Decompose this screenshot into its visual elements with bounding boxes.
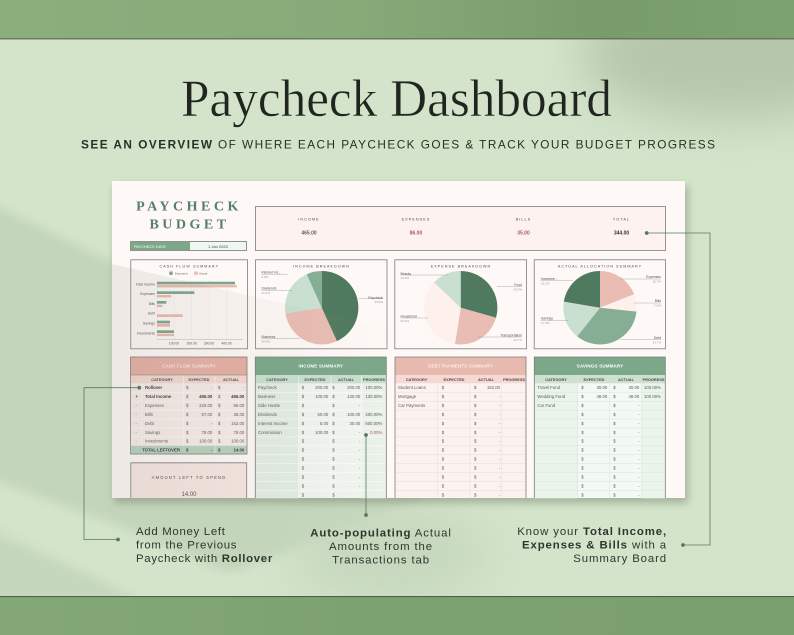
- table: income summary: 100.00: [315, 394, 329, 399]
- table: income summary: 100.00: [315, 430, 329, 435]
- table: income summary: 30.00: [350, 421, 361, 426]
- table: cash flow summary: 78.00: [202, 430, 213, 435]
- table: savings summary: ACTUAL: [618, 377, 635, 382]
- pie chart: income breakdown: 6.5%: [262, 275, 269, 279]
- callout: auto-populating: Amounts from the: [329, 541, 433, 553]
- pie chart: expense breakdown: Household: [400, 314, 417, 318]
- table: income summary: --------: [359, 403, 361, 488]
- table: cash flow summary: -----: [136, 403, 138, 444]
- table: cash flow summary: Rollover: [145, 385, 163, 390]
- pie chart: expense breakdown: Transportation: [500, 334, 522, 338]
- card: dashboard sheet: [112, 181, 688, 503]
- table: cash flow summary: TOTAL LEFTOVER: [142, 448, 181, 453]
- bar chart: cash flow summary: 300.00: [204, 341, 214, 345]
- amount left to spend: AMOUNT LEFT TO SPEND: [152, 475, 226, 480]
- summary board: EXPENSES: [402, 218, 430, 222]
- pie chart: actual allocation summary: Savings: [541, 316, 553, 320]
- table: debt payments summary: $$$$$$$$$$$$$: [442, 385, 445, 497]
- table: cash flow summary: CASH FLOW SUMMARY: [162, 364, 216, 368]
- table: income summary: 130.00: [347, 394, 361, 399]
- summary board: 465.00: [301, 230, 317, 236]
- table: savings summary: 100.00%: [644, 394, 661, 399]
- paycheck date bar: 1 Jan 2023: [208, 244, 229, 249]
- table: cash flow summary: Debt: [145, 421, 155, 426]
- bar chart: cash flow summary: -: [156, 341, 158, 345]
- table: debt payments summary: DEBT PAYMENTS SUMMARY: [428, 364, 493, 368]
- callout: auto-populating: Auto-populating Actual: [310, 528, 452, 540]
- table: savings summary: 48.00: [629, 394, 640, 399]
- bar chart: cash flow summary: Bills: [149, 302, 155, 306]
- table: cash flow summary: $$$$$$$: [186, 385, 189, 444]
- table: savings summary: -----------: [638, 403, 640, 497]
- table: income summary: INCOME SUMMARY: [298, 364, 343, 368]
- table: savings summary: 100.00%: [644, 385, 661, 390]
- table: cash flow summary: Investments: [145, 439, 168, 444]
- arrow: auto-populating connector: [364, 433, 368, 517]
- table: cash flow summary: ACTUAL: [223, 377, 240, 382]
- pie chart: expense breakdown: 32.6%: [400, 319, 409, 323]
- pie chart: expense breakdown: [395, 260, 526, 349]
- pie chart: actual allocation summary: Expenses: [646, 275, 661, 279]
- table: cash flow summary: [130, 357, 247, 454]
- table: cash flow summary: 100.00: [231, 439, 245, 444]
- summary board: BILLS: [516, 218, 531, 222]
- table: income summary: ACTUAL: [338, 377, 355, 382]
- table: income summary: Side Hustle: [258, 403, 281, 408]
- summary board: 344.00: [614, 230, 629, 236]
- table: income summary: Commission: [258, 430, 282, 435]
- table: debt payments summary: EXPECTED: [444, 377, 465, 382]
- pie chart: income breakdown: Dividends: [262, 286, 277, 290]
- table: income summary: Interest Income: [258, 421, 288, 426]
- table: debt payments summary: Car Payments: [398, 403, 425, 408]
- pie chart: expense breakdown: 32.0%: [513, 288, 522, 292]
- table: income summary: 0.00%: [370, 430, 382, 435]
- table: cash flow summary: 35.00: [234, 412, 245, 417]
- callout: summary board: Summary Board: [573, 553, 667, 565]
- table: income summary: $$$$$$$$$$$$$: [332, 385, 335, 497]
- table: income summary: 50.00: [318, 412, 329, 417]
- pie chart: expense breakdown: 12.9%: [400, 276, 409, 280]
- table: income summary: CATEGORY: [266, 377, 288, 382]
- arrow: summary board connector: [645, 231, 710, 547]
- table: cash flow summary: EXPECTED: [189, 377, 210, 382]
- sheet title: [136, 200, 242, 232]
- pie chart: income breakdown: Paycheck: [368, 296, 383, 300]
- table: income summary: 100.00: [347, 412, 361, 417]
- table: savings summary: 48.00: [597, 394, 608, 399]
- table: debt payments summary: PROGRESS: [503, 377, 525, 382]
- bar chart: cash flow summary: Expenses: [140, 292, 155, 296]
- table: cash flow summary: 14.00: [234, 448, 245, 453]
- table: income summary: PROGRESS: [363, 377, 385, 382]
- table: income summary: 130.00%: [365, 394, 382, 399]
- table: cash flow summary: -: [211, 421, 213, 426]
- table: cash flow summary: 100.00: [199, 439, 213, 444]
- pie chart: actual allocation summary: Bills: [655, 299, 661, 303]
- table: savings summary: 30.00: [629, 385, 640, 390]
- bar chart: cash flow summary: Actual: [199, 271, 208, 275]
- callout: rollover: [136, 526, 273, 565]
- table: income summary: 600.00%: [365, 421, 382, 426]
- bar chart: cash flow summary: [131, 260, 248, 349]
- pie chart: income breakdown: INCOME BREAKDOWN: [293, 264, 350, 268]
- table: cash flow summary: Total Income: [145, 394, 172, 399]
- table: income summary: 100.00%: [365, 385, 382, 390]
- pie chart: actual allocation summary: 17.0%: [541, 321, 550, 325]
- pie chart: income breakdown: 43.0%: [374, 300, 383, 304]
- pie chart: actual allocation summary: 18.7%: [652, 280, 661, 284]
- table: debt payments summary: Student Loans: [398, 385, 426, 390]
- pie chart: income breakdown: 29.3%: [262, 340, 270, 344]
- pie chart: actual allocation summary: Investme...: [541, 277, 558, 281]
- pie chart: income breakdown: Business: [262, 335, 276, 339]
- amount left to spend: 14.00: [181, 492, 197, 498]
- summary board: 35.00: [517, 230, 530, 236]
- bar chart: cash flow summary: CASH FLOW SUMMARY: [160, 264, 219, 268]
- table: cash flow summary: 220.00: [199, 403, 213, 408]
- table: cash flow summary: 78.00: [234, 430, 245, 435]
- table: savings summary: 30.00: [597, 385, 608, 390]
- pie chart: actual allocation summary: 33.7%: [652, 340, 661, 344]
- table: savings summary: Wedding Fund: [537, 394, 566, 399]
- table: savings summary: CATEGORY: [545, 377, 567, 382]
- pie chart: expense breakdown: Beauty: [400, 272, 411, 276]
- table: cash flow summary: $$$$$$$: [218, 385, 221, 444]
- table: cash flow summary: 57.00: [202, 412, 213, 417]
- callout: auto-populating: [310, 528, 452, 566]
- bar chart: cash flow summary: Debt: [148, 312, 155, 316]
- table: cash flow summary: 465.00: [199, 394, 213, 399]
- paycheck date bar: PAYCHECK DATE: [134, 244, 166, 249]
- table: savings summary: $$$$$$$$$$$$$: [581, 385, 584, 497]
- table: savings summary: PROGRESS: [642, 377, 665, 382]
- table: cash flow summary: $: [218, 448, 221, 453]
- callout: rollover: Paycheck with Rollover: [136, 553, 273, 565]
- pie chart: income breakdown: Internet Inc...: [262, 270, 281, 274]
- summary board: INCOME: [298, 218, 320, 222]
- table: debt payments summary: ACTUAL: [478, 377, 495, 382]
- table: savings summary: Car Fund: [537, 403, 556, 408]
- table: debt payments summary: CATEGORY: [406, 377, 428, 382]
- amount left to spend: [131, 463, 247, 498]
- bottom band: [0, 596, 794, 635]
- table: cash flow summary: CATEGORY: [151, 377, 173, 382]
- table: income summary: 200.00: [315, 385, 329, 390]
- table: debt payments summary: 152.00: [487, 385, 501, 390]
- table: income summary: 5.00: [320, 421, 329, 426]
- table: income summary: Business: [258, 394, 275, 399]
- arrow: rollover connector: [84, 386, 141, 541]
- bar chart: cash flow summary: Investments: [137, 331, 155, 335]
- table: cash flow summary: +: [136, 394, 138, 399]
- summary board: TOTAL: [613, 218, 630, 222]
- pie chart: expense breakdown: 22.7%: [513, 338, 522, 342]
- sheet title: PAYCHECK: [136, 200, 242, 214]
- table: cash flow summary: Savings: [145, 430, 160, 435]
- sheet title: BUDGET: [149, 218, 230, 232]
- table: cash flow summary: $: [186, 448, 189, 453]
- pie chart: expense breakdown: Food: [514, 283, 522, 287]
- table: income summary: Dividends: [258, 412, 277, 417]
- subtitle: SEE AN OVERVIEW: [81, 138, 213, 152]
- table: income summary: Paycheck: [258, 385, 277, 390]
- callout: rollover: Add Money Left: [136, 526, 226, 538]
- table: cash flow summary: 465.00: [231, 394, 245, 399]
- table: debt payments summary: [395, 357, 526, 498]
- callout: summary board: [517, 526, 667, 565]
- paycheck date bar: [130, 242, 246, 250]
- pie chart: actual allocation summary: 22.2%: [541, 282, 550, 286]
- bar chart: cash flow summary: 200.00: [187, 341, 197, 345]
- summary board: [256, 206, 666, 250]
- bar chart: cash flow summary: Expected: [175, 271, 188, 275]
- table: income summary: 200.00%: [365, 412, 382, 417]
- pie chart: income breakdown: [256, 260, 387, 349]
- table: savings summary: SAVINGS SUMMARY: [577, 364, 623, 368]
- table: income summary: [255, 357, 386, 498]
- title: Paycheck Dashboard: [181, 70, 612, 128]
- table: savings summary: [534, 357, 665, 498]
- pie chart: actual allocation summary: [534, 260, 666, 349]
- table: cash flow summary: -: [211, 448, 213, 453]
- table: debt payments summary: $$$$$$$$$$$$$: [474, 385, 477, 497]
- top band: [0, 0, 794, 39]
- callout: summary board: Expenses & Bills with a: [522, 540, 667, 552]
- bar chart: cash flow summary: Total Income: [136, 282, 155, 286]
- table: income summary: $$$$$$$$$$$$$: [302, 385, 305, 497]
- table: cash flow summary: Expenses: [145, 403, 164, 408]
- bar chart: cash flow summary: Savings: [143, 322, 155, 326]
- bar chart: cash flow summary: 100.00: [169, 341, 179, 345]
- callout: summary board: Know your Total Income,: [517, 526, 667, 538]
- pie chart: income breakdown: 21.2%: [262, 291, 270, 295]
- table: debt payments summary: Mortgage: [398, 394, 417, 399]
- table: savings summary: EXPECTED: [584, 377, 605, 382]
- table: income summary: EXPECTED: [305, 377, 326, 382]
- table: cash flow summary: -: [211, 385, 213, 390]
- pie chart: actual allocation summary: 7.6%: [654, 304, 661, 308]
- table: income summary: 200.00: [347, 385, 361, 390]
- subtitle: OF WHERE EACH PAYCHECK GOES & TRACK YOUR BUDGET PROGRESS: [218, 138, 715, 152]
- table: cash flow summary: Bills: [145, 412, 153, 417]
- callout: rollover: from the Previous: [136, 540, 237, 552]
- pie chart: actual allocation summary: Debt: [654, 336, 661, 340]
- bar chart: cash flow summary: 400.00: [221, 341, 232, 345]
- table: debt payments summary: ------------: [499, 394, 501, 497]
- table: savings summary: $$$$$$$$$$$$$: [613, 385, 616, 497]
- table: cash flow summary: 152.00: [231, 421, 245, 426]
- table: savings summary: Travel Fund: [537, 385, 561, 390]
- table: cash flow summary: 86.00: [234, 403, 245, 408]
- pie chart: expense breakdown: EXPENSE BREAKDOWN: [431, 264, 491, 268]
- summary board: 86.00: [410, 230, 422, 236]
- table: cash flow summary: -: [243, 385, 245, 390]
- pie chart: actual allocation summary: ACTUAL ALLOCATION SUMMARY: [558, 264, 642, 268]
- callout: auto-populating: Transactions tab: [332, 554, 430, 566]
